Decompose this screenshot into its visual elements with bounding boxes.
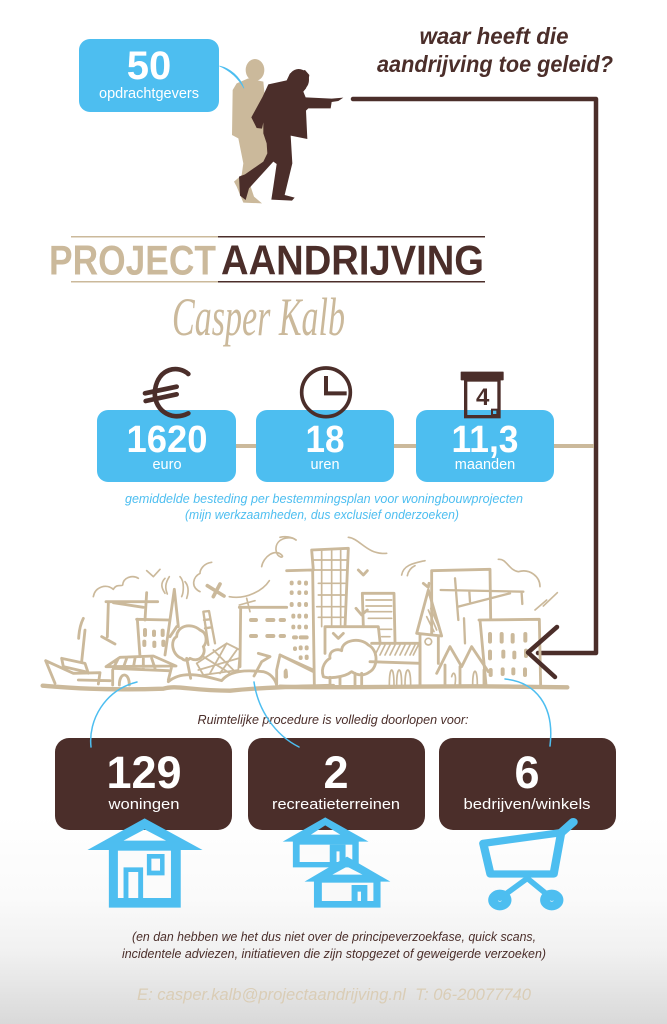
arrowhead pointing at city (528, 627, 557, 677)
signature: Casper Kalb: Casper Kalb (172, 287, 345, 347)
icon: calendar: 4 (476, 384, 490, 411)
stat box: 2 recreatieterreinen: 2 (323, 747, 349, 798)
stat box: 129 woningen (55, 738, 232, 830)
curved lines from city to boxes (91, 679, 551, 747)
connector bar between blue boxes (236, 444, 594, 448)
stat box: 6 bedrijven/winkels: bedrijven/winkels (464, 796, 590, 813)
stat box: 2 recreatieterreinen (248, 738, 425, 830)
stat box: 6 bedrijven/winkels (439, 738, 616, 830)
logo: Projectaandrijving: AANDRIJVING (221, 236, 484, 284)
stat box: 11,3 maanden: 11,3 (452, 419, 518, 461)
stat box: 1620 euro: 1620 (126, 419, 208, 461)
logo: Projectaandrijving (49, 236, 485, 284)
stat box: 50 opdrachtgevers: 50 (127, 44, 171, 88)
caption: gemiddelde besteding: gemiddelde besteding per bestemmingsplan voor woningbouwprojecten (125, 491, 523, 506)
stat box: 1620 euro: euro (152, 457, 182, 473)
stat box: 18 uren: uren (310, 457, 340, 473)
caption: gemiddelde besteding: (mijn werkzaamheden, dus exclusief onderzoeken) (185, 507, 459, 522)
stat box: 50 opdrachtgevers: opdrachtgevers (99, 85, 199, 102)
stat box: 11,3 maanden: maanden (455, 457, 515, 473)
stat box: 18 uren: 18 (306, 419, 344, 461)
caption: gemiddelde besteding (125, 491, 523, 522)
connector line from pointing figure to city arrow (353, 99, 596, 653)
note: principeverzoekfase: (en dan hebben we het dus niet over de principeverzoekfase, quick scans, (132, 929, 536, 944)
stat box: 2 recreatieterreinen: recreatieterreinen (272, 796, 400, 813)
icon: house (87, 818, 203, 908)
contact line: E: casper.kalb@projectaandrijving.nl T: 06-20077740 (137, 985, 532, 1004)
figures: client and pointing man (219, 59, 343, 203)
stat box: 6 bedrijven/winkels: 6 (514, 747, 540, 798)
stat box: 129 woningen: woningen (107, 796, 180, 813)
illustration: city skyline (43, 537, 567, 691)
title: question: waar heeft die (420, 23, 569, 49)
city right half (280, 537, 567, 687)
note: principeverzoekfase (122, 929, 546, 961)
icon: shopping cart (483, 822, 573, 906)
logo: Projectaandrijving: PROJECT (49, 236, 216, 284)
icon: two houses (283, 817, 390, 908)
heading: ruimtelijke procedure: Ruimtelijke procedure is volledig doorlopen voor: (198, 712, 469, 727)
stat box: 50 opdrachtgevers (79, 39, 219, 112)
icon: calendar (461, 372, 504, 417)
city left half (43, 538, 333, 691)
icon: euro (145, 369, 188, 416)
stat box: 129 woningen: 129 (106, 747, 182, 798)
title: question: aandrijving toe geleid? (377, 51, 613, 77)
note: principeverzoekfase: incidentele adviezen, initiatieven die zijn stopgezet of geweigerde verzoeken) (122, 946, 546, 961)
stat box: 11,3 maanden (416, 410, 554, 482)
stat box: 18 uren (256, 410, 394, 482)
title: question (377, 23, 613, 77)
stat box: 1620 euro (97, 410, 236, 482)
icon: clock (302, 368, 350, 417)
